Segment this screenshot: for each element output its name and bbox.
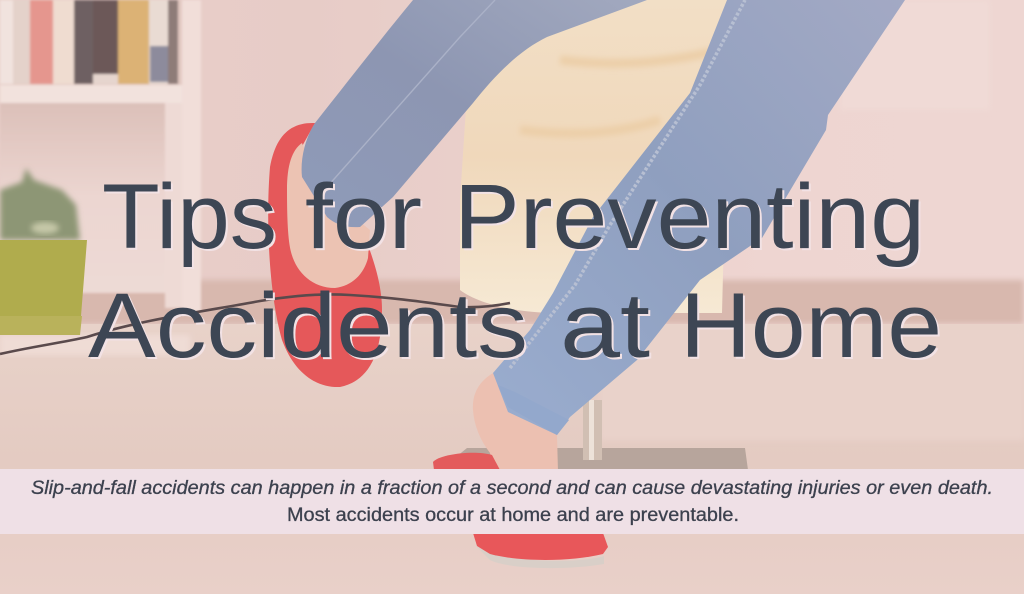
potted plant bbox=[0, 168, 87, 335]
scratching post bbox=[460, 0, 730, 313]
title shadow: at bbox=[562, 277, 652, 379]
caption text: Slip-and-fall accidents can happen in a fraction of a second and can cause devastating injuries or even death. bbox=[31, 477, 993, 499]
title shadow: Accidents bbox=[90, 277, 530, 379]
caption text bbox=[31, 477, 993, 526]
title shadow bbox=[90, 168, 944, 379]
title bbox=[88, 166, 944, 379]
red slipper and foot, back leg bbox=[268, 123, 382, 387]
title shadow: Home bbox=[682, 277, 944, 379]
stand base and rod bbox=[440, 400, 748, 470]
title text: Preventing bbox=[454, 166, 925, 268]
caption text: Most accidents occur at home and are preventable. bbox=[287, 504, 739, 526]
title shadow: Preventing bbox=[456, 168, 927, 270]
title text: for bbox=[305, 166, 422, 268]
title shadow: Tips bbox=[104, 168, 279, 270]
red slipper, front foot bbox=[433, 453, 608, 568]
front foot bbox=[473, 373, 558, 472]
back leg in jeans bbox=[302, 0, 647, 227]
caption band bbox=[0, 469, 1024, 534]
title text: at bbox=[560, 275, 650, 377]
title shadow: for bbox=[307, 168, 424, 270]
front leg in jeans bbox=[493, 0, 905, 435]
title text: Accidents bbox=[88, 275, 528, 377]
title text: Home bbox=[680, 275, 942, 377]
electrical cord bbox=[0, 294, 510, 354]
title text bbox=[88, 166, 942, 377]
bookshelf with books bbox=[0, 0, 201, 312]
title text: Tips bbox=[102, 166, 277, 268]
